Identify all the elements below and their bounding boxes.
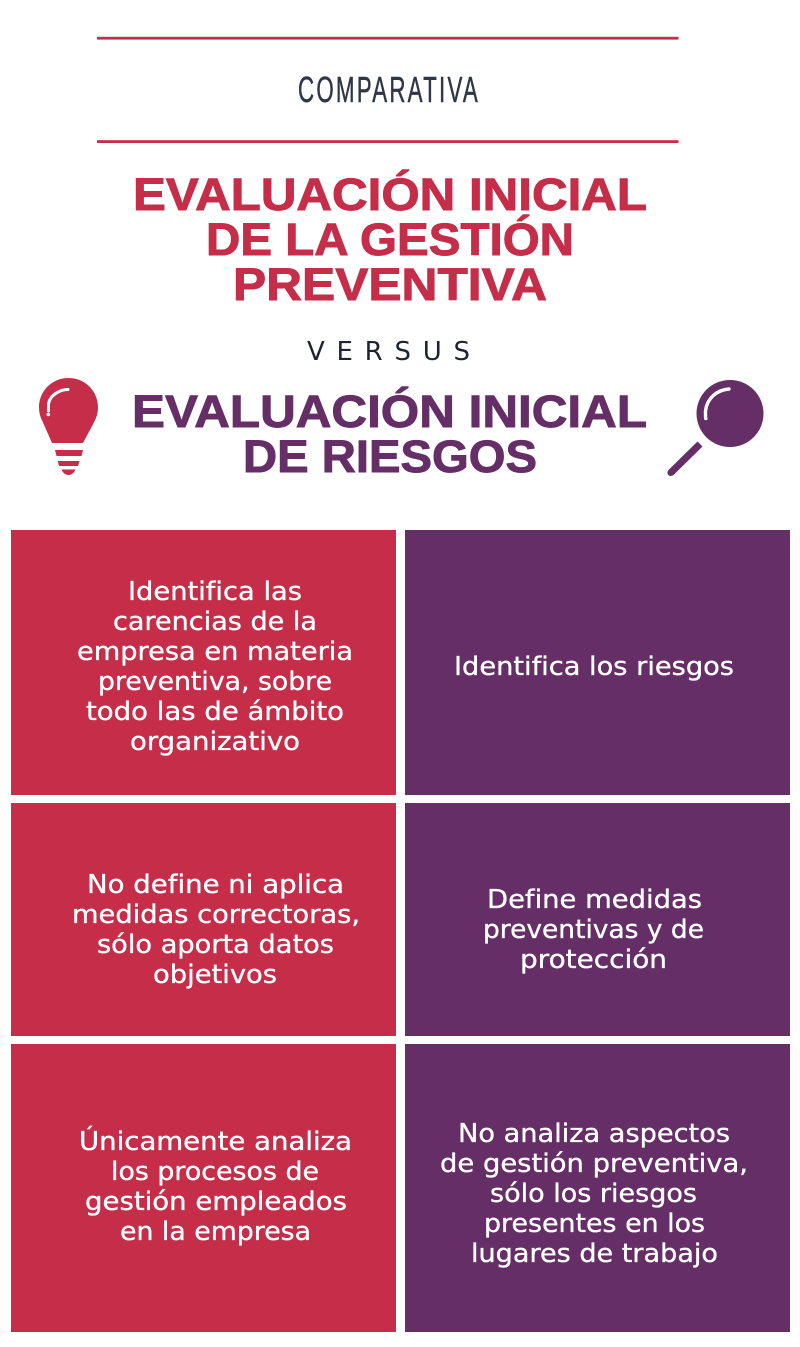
text block: carencias: organizativo [130,727,300,757]
text block: medidas correctoras: medidas correctoras, [72,900,360,930]
text block: carencias: carencias de la [113,607,317,637]
text block: medidas correctoras: sólo aporta datos [97,930,334,960]
icon: magnifying glass [667,380,764,476]
text block: riesgos presentes: sólo los riesgos [490,1179,697,1209]
title: evaluación inicial de la gestión preventiva: EVALUACIÓN INICIAL [133,169,647,220]
text block: medidas preventivas: Define medidas [487,885,702,915]
title: evaluación inicial de la gestión preventiva [133,169,647,310]
text block: medidas correctoras [72,870,360,990]
panel: medidas correctoras [11,803,396,1036]
title: evaluación inicial de riesgos [132,386,647,482]
panel: riesgos [405,530,790,795]
text block: riesgos presentes [440,1119,748,1269]
text block: procesos de gestión [79,1126,352,1247]
heading: comparativa: COMPARATIVA [298,71,478,110]
text block: medidas preventivas: preventivas y de [483,915,704,945]
title: evaluación inicial de la gestión preventiva: DE LA GESTIÓN [206,214,574,265]
text block: riesgos presentes: No analiza aspectos [458,1119,730,1149]
text block: riesgos presentes: presentes en los [484,1209,705,1239]
text: versus: VERSUS [307,337,470,367]
title: evaluación inicial de riesgos: DE RIESGOS [243,431,537,482]
title: evaluación inicial de riesgos: EVALUACIÓN INICIAL [132,386,647,437]
text block: procesos de gestión: en la empresa [120,1217,311,1247]
panel: carencias [11,530,396,795]
icon: light bulb [39,378,98,475]
text block: procesos de gestión: los procesos de [111,1157,319,1187]
text block: procesos de gestión: Únicamente analiza [79,1126,352,1157]
text block: medidas preventivas [483,885,704,975]
text block: carencias: todo las de ámbito [86,697,344,727]
text block: riesgos: Identifica los riesgos [454,652,734,682]
text block: carencias: preventiva, sobre [98,667,332,697]
title: evaluación inicial de la gestión preventiva: PREVENTIVA [233,259,547,310]
panel: medidas preventivas [405,803,790,1036]
text block: medidas correctoras: objetivos [153,960,277,990]
text block: riesgos presentes: de gestión preventiva, [440,1149,748,1179]
text block: medidas correctoras: No define ni aplica [87,870,344,900]
panel: riesgos presentes [405,1044,790,1332]
text block: riesgos presentes: lugares de trabajo [471,1239,718,1269]
text block: carencias: empresa en materia [77,637,353,667]
text block: medidas preventivas: protección [520,945,667,975]
text block: carencias [77,577,353,757]
text block: carencias: Identifica las [128,577,302,607]
panel: procesos de gestión [11,1044,396,1332]
text block: procesos de gestión: gestión empleados [85,1187,347,1217]
